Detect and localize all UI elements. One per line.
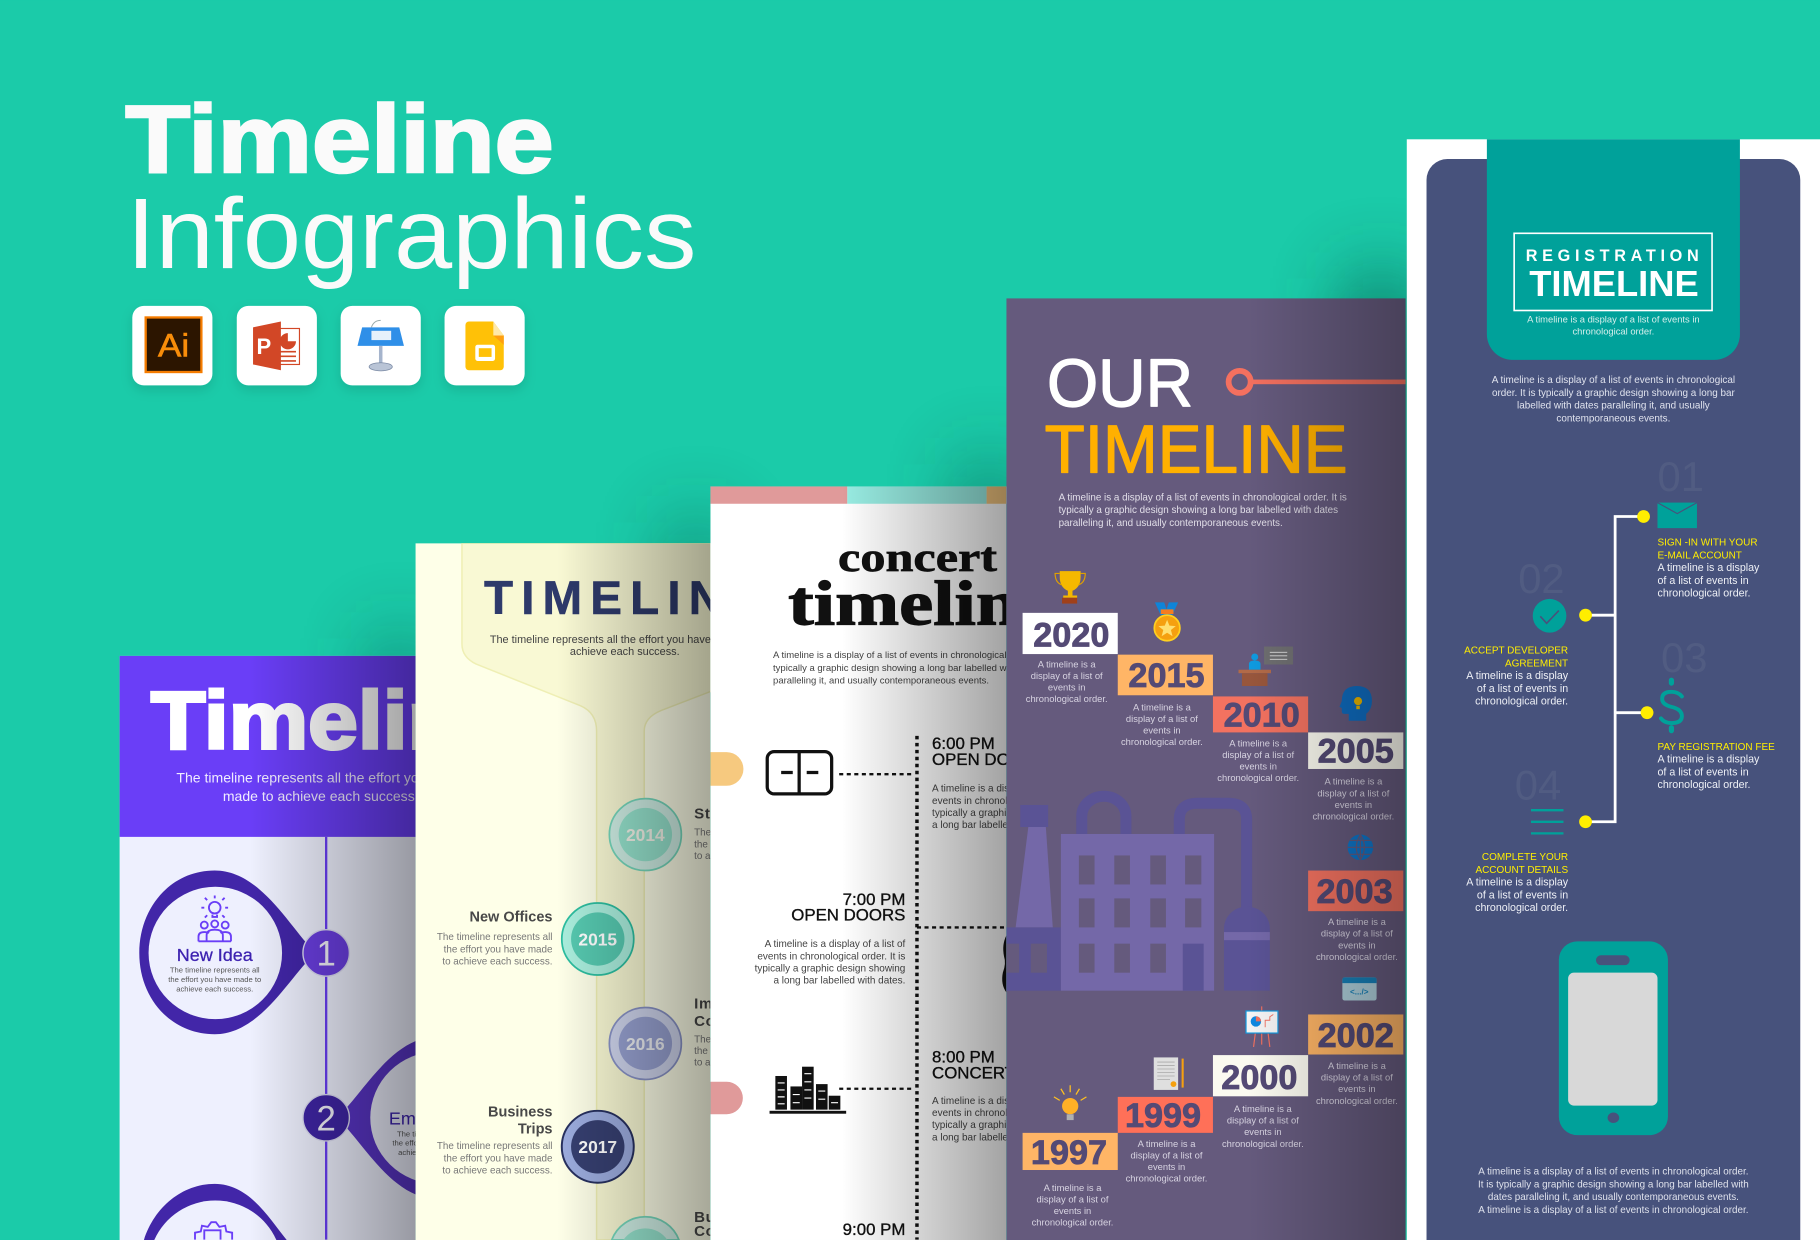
event 7pm [755,890,906,987]
intro text: typically a graphic design showing a long bar labelled with dates [773,663,1043,674]
year 2010: 2010 [1224,697,1300,735]
event 8pm [932,1048,1083,1143]
title box: TIMELINE [1529,263,1699,304]
year 2000: events in [1244,1126,1282,1137]
year 2003 [1308,871,1403,962]
funnel [462,543,743,1240]
step 4 text: ACCOUNT DETAILS [1475,865,1568,876]
panel: purple timeline: achieve [398,1148,425,1157]
event 9pm: 9:00 PM [843,1220,905,1239]
icon: speaker at desk [1238,647,1293,686]
label: new offices [437,910,553,968]
year 2020: events in [1048,682,1085,693]
shade [120,656,416,1240]
icon: phone [1559,941,1668,1135]
intro text: A timeline is a display of a list of events in chronological [1492,375,1735,386]
icon: envelope [1658,503,1697,528]
panel: purple timeline: The timeline represents all [170,966,260,975]
shade [1006,298,1406,1240]
year 2020: A timeline is a [1038,658,1096,669]
node 2014: 2014 [626,825,665,845]
year 1997: chronological order. [1032,1217,1113,1228]
event 6pm: A timeline is a display of a list of [932,784,1073,795]
heading [788,535,1053,638]
label: new offices: to achieve each success. [442,957,553,968]
panel shadows [383,279,1410,1207]
year 2010: chronological order. [1217,772,1299,783]
year 2005: display of a list of [1317,787,1390,798]
title: Infographics [127,179,696,290]
year 1997: events in [1054,1205,1091,1216]
label: new offices: The timeline represents all [437,932,552,943]
footer text: A timeline is a display of a list of events in chronological order. [1478,1205,1748,1216]
year 1997: 1997 [1031,1134,1107,1172]
year 2003: display of a list of [1321,928,1393,939]
node 2016 [609,1008,681,1079]
node 2015 [562,903,634,975]
year 2020: chronological order. [1026,693,1108,704]
step 1 text: of a list of events in [1658,575,1749,587]
label: improve: Improve [694,996,758,1013]
icon: check badge [1533,599,1566,633]
label: improve [694,996,768,1069]
step 4 text: COMPLETE YOUR [1482,852,1568,863]
node 2017 [562,1111,634,1183]
event 8pm: events in chronological order. It is [932,1108,1080,1119]
header tab [1487,139,1740,360]
step 3 text: A timeline is a display [1658,754,1760,766]
step 1 text: New Idea [177,945,253,965]
step 1 teardrop [139,871,316,1034]
label: improve: to achieve [694,1058,740,1069]
icon: dollar [1661,680,1682,731]
intro text: paralleling it, and usually contemporaneous events. [773,676,989,687]
year 2002: A timeline is a [1328,1060,1387,1071]
heading: TIMELINE [1045,412,1348,487]
year 2003: events in [1338,939,1376,950]
year 2005: chronological order. [1312,810,1394,821]
year 1999: A timeline is a [1138,1138,1196,1149]
event 8pm: 8:00 PM [932,1048,995,1067]
orange pill [710,752,743,786]
event 7pm: a long bar labelled with dates. [773,976,905,987]
label: new offices: the effort you have made [444,944,553,955]
year 1997: display of a list of [1037,1194,1109,1205]
title box [1514,233,1712,310]
icon: medal [1154,602,1180,641]
shade [710,486,1006,1240]
step 2 text: A timeline is a display [1466,670,1569,682]
heading: Timeline [151,676,512,767]
label: business trips: to achieve each success. [442,1165,553,1176]
year 2010: events in [1239,761,1277,772]
connector dots [1579,510,1653,828]
title box: REGISTRATION [1526,247,1699,265]
year 1999: events in [1148,1161,1185,1172]
event 7pm: events in chronological order. It is [757,951,905,962]
panel: purple timeline: the effort you [392,1139,437,1148]
year 2003: 2003 [1316,873,1393,911]
event 7pm: typically a graphic design showing [755,964,905,975]
node 2018 [612,1217,679,1240]
dotted spine [915,736,918,1240]
year 2015 [1118,655,1213,747]
event 6pm: a long bar labelled with dates. [932,820,1064,831]
step 4 text: chronological order. [1475,902,1568,914]
year 2002 [1308,1014,1403,1106]
year 2005: 2005 [1318,733,1394,771]
year 2020: display of a list of [1031,670,1103,681]
panel: purple timeline: The timeline [397,1129,439,1138]
year 2000: A timeline is a [1234,1103,1293,1114]
intro text: A timeline is a display of a list of events in chronological order. It is [773,650,1051,661]
title [125,87,696,290]
event 6pm [932,734,1083,831]
event 6pm: OPEN DOORS [932,750,1046,769]
footer text: A timeline is a display of a list of events in chronological order. [1478,1167,1748,1178]
label: business: Company [694,1223,768,1240]
intro text: typically a graphic design showing a long bar labelled with dates [1059,505,1338,516]
step 3 text [1658,742,1775,791]
label: start: The timeline [694,828,748,839]
footer text: dates paralleling it, and usually contemporaneous events. [1488,1192,1739,1203]
year 2005: events in [1335,799,1372,810]
panel: our timeline [1006,298,1406,1240]
shade [416,543,710,1240]
step 1 text: SIGN -IN WITH YOUR [1658,538,1758,549]
intro text: The timeline represents all the effort you have [176,769,461,785]
illustration: factory [1006,796,1270,991]
tab text: A timeline is a display of a list of events in [1527,314,1700,325]
year 2002: display of a list of [1321,1072,1393,1083]
pink pill [710,1082,743,1114]
year 2005: A timeline is a [1324,776,1383,787]
icon: Adobe Illustrator: Ai [158,327,189,363]
icon: PowerPoint [237,306,317,385]
step 2 text [1464,645,1569,708]
panel: purple timeline: achieve each success. [176,984,253,993]
event 8pm: a long bar labelled with dates. [932,1132,1064,1143]
year 2020 [1023,613,1118,704]
icon: globe [1348,835,1373,860]
icon: Google Slides [445,306,525,385]
year 2015: chronological order. [1121,736,1203,747]
icon: Adobe Illustrator [132,306,212,385]
year 2020: 2020 [1033,617,1109,655]
icon: skyline [770,1067,846,1114]
label: business trips: the effort you have made [444,1153,553,1164]
step 4 text: A timeline is a display [1466,877,1569,889]
step 2 text: chronological order. [1475,696,1568,708]
step 2 text: Employees [389,1109,478,1129]
panel: purple timeline: the effort you have made to [168,975,261,984]
label: improve: the effort [694,1046,733,1057]
year 2000: 2000 [1221,1059,1297,1097]
step 4 text: of a list of events in [1477,889,1568,901]
intro text: A timeline is a display of a list of events in chronological order. It is [1059,492,1347,503]
year 2000 [1213,1055,1308,1149]
intro text: labelled with dates paralleling it, and usually [1517,401,1710,412]
label: improve: The timeline [694,1034,748,1045]
year 2003: A timeline is a [1328,916,1387,927]
icon: gear fist [195,1222,232,1240]
step 2 text: ACCEPT DEVELOPER [1464,645,1568,656]
step 3 text: of a list of events in [1658,766,1749,778]
panel: cream timeline [416,543,771,1240]
year 2010 [1213,696,1308,783]
numerals: 04 [1515,762,1561,809]
step 1 text [1658,538,1760,600]
year 2003: chronological order. [1316,951,1398,962]
node 2015: 2015 [578,929,617,949]
number 1 [303,930,349,976]
node 2016: 2016 [626,1034,665,1054]
step 2 teardrop [337,1037,513,1199]
node 2014 [609,799,681,871]
icon: PowerPoint: P [257,334,271,359]
footer text: It is typically a graphic design showing a long bar labelled with [1478,1179,1749,1190]
year 2015: events in [1143,725,1181,736]
intro text: made to achieve each success. [223,788,419,804]
dotted connectors [839,774,1006,1089]
intro text: order. It is typically a graphic design showing a long bar [1492,388,1736,399]
numerals [1515,453,1707,809]
event 8pm: A timeline is a display of a list of [932,1096,1073,1107]
icon: code window [1342,977,1377,1001]
icon: Keynote [341,306,421,385]
label: business trips: Trips [518,1121,552,1137]
step 3 text: PAY REGISTRATION FEE [1658,742,1775,753]
icon: presentation easel [1246,1006,1278,1047]
year 2015: A timeline is a [1133,701,1192,712]
heading: TIMELINE [484,572,771,625]
year 2005 [1308,732,1403,821]
label: improve: Company [694,1013,768,1030]
label: business trips [437,1105,553,1176]
year 1997 [1023,1133,1118,1228]
event 6pm: events in chronological order. It is [932,796,1080,807]
title: Timeline [125,87,554,193]
year 1999: chronological order. [1126,1173,1207,1184]
year 2015: display of a list of [1126,713,1198,724]
event 6pm: typically a graphic design showing [932,808,1083,819]
icon: guitar part [1002,936,1006,992]
connector tree [1586,517,1646,822]
intro text: contemporaneous events. [1556,413,1670,424]
step 1 text: A timeline is a display [1658,562,1760,574]
label: start [694,805,748,862]
step 4 text [1466,852,1569,914]
panel: concert timeline [710,486,1083,1240]
top stripes [710,486,1006,504]
numerals: 01 [1658,453,1704,500]
icon: doors [767,752,832,794]
label: business trips: The timeline represents all [437,1141,552,1152]
year 2000: display of a list of [1227,1115,1299,1126]
year 2002: chronological order. [1316,1095,1398,1106]
label: start: Start [694,805,732,822]
step 3 text: chronological order. [1658,779,1751,791]
heading: concert [838,535,997,581]
intro text: achieve each success. [570,646,680,658]
year 1999: display of a list of [1131,1149,1203,1160]
number 1: 1 [316,935,336,974]
heading: timeline [788,567,1053,638]
step 1 text: chronological order. [1658,588,1751,600]
icon: code window: <.../> [1350,988,1369,997]
year 1999: 1999 [1125,1097,1201,1135]
label: business trips: Business [488,1105,553,1121]
heading [1045,346,1348,487]
year 2010: display of a list of [1222,749,1295,760]
icon: head with bulb [1339,686,1372,721]
year 1999 [1118,1097,1213,1184]
icon: idea team [198,895,231,941]
event 8pm: CONCERT [932,1063,1015,1082]
label: start: the effort [694,839,733,850]
icon: ring and line [1229,371,1406,393]
year 2015: 2015 [1128,657,1205,695]
event 7pm: OPEN DOORS [791,905,905,924]
label: start: to achieve [694,851,740,862]
number 2: 2 [316,1100,336,1139]
inner card [1427,159,1800,1240]
node 2017: 2017 [578,1137,617,1157]
step 2 text: AGREEMENT [1505,658,1568,669]
intro text: The timeline represents all the effort you have made to [490,634,753,646]
step 3 teardrop [144,1184,287,1240]
icon: trophy [1055,571,1085,604]
step 1 text: E-MAIL ACCOUNT [1658,550,1742,561]
icon: list lines [1531,810,1563,833]
numerals: 02 [1518,555,1565,602]
event 8pm: typically a graphic design showing [932,1120,1083,1131]
event 7pm: A timeline is a display of a list of [765,939,906,950]
year 2002: events in [1338,1083,1376,1094]
step 2 text: of a list of events in [1477,683,1568,695]
icon: certificate [1154,1057,1184,1090]
numerals: 03 [1661,634,1707,681]
icon: light bulb [1054,1085,1086,1120]
panel: purple timeline [120,656,416,1240]
heading: OUR [1047,346,1193,421]
label: new offices: New Offices [470,910,552,926]
year 2000: chronological order. [1222,1138,1304,1149]
year 2010: A timeline is a [1229,737,1288,748]
year 1997: A timeline is a [1044,1182,1102,1193]
panel: registration timeline [1407,139,1820,1240]
intro text: paralleling it, and usually contemporaneous events. [1059,518,1283,529]
number 2 [303,1095,349,1141]
year 2002: 2002 [1318,1017,1394,1055]
event 7pm: 7:00 PM [843,890,905,909]
event 6pm: 6:00 PM [932,734,995,753]
tab text: chronological order. [1572,325,1654,336]
label: business: Business [694,1209,767,1226]
